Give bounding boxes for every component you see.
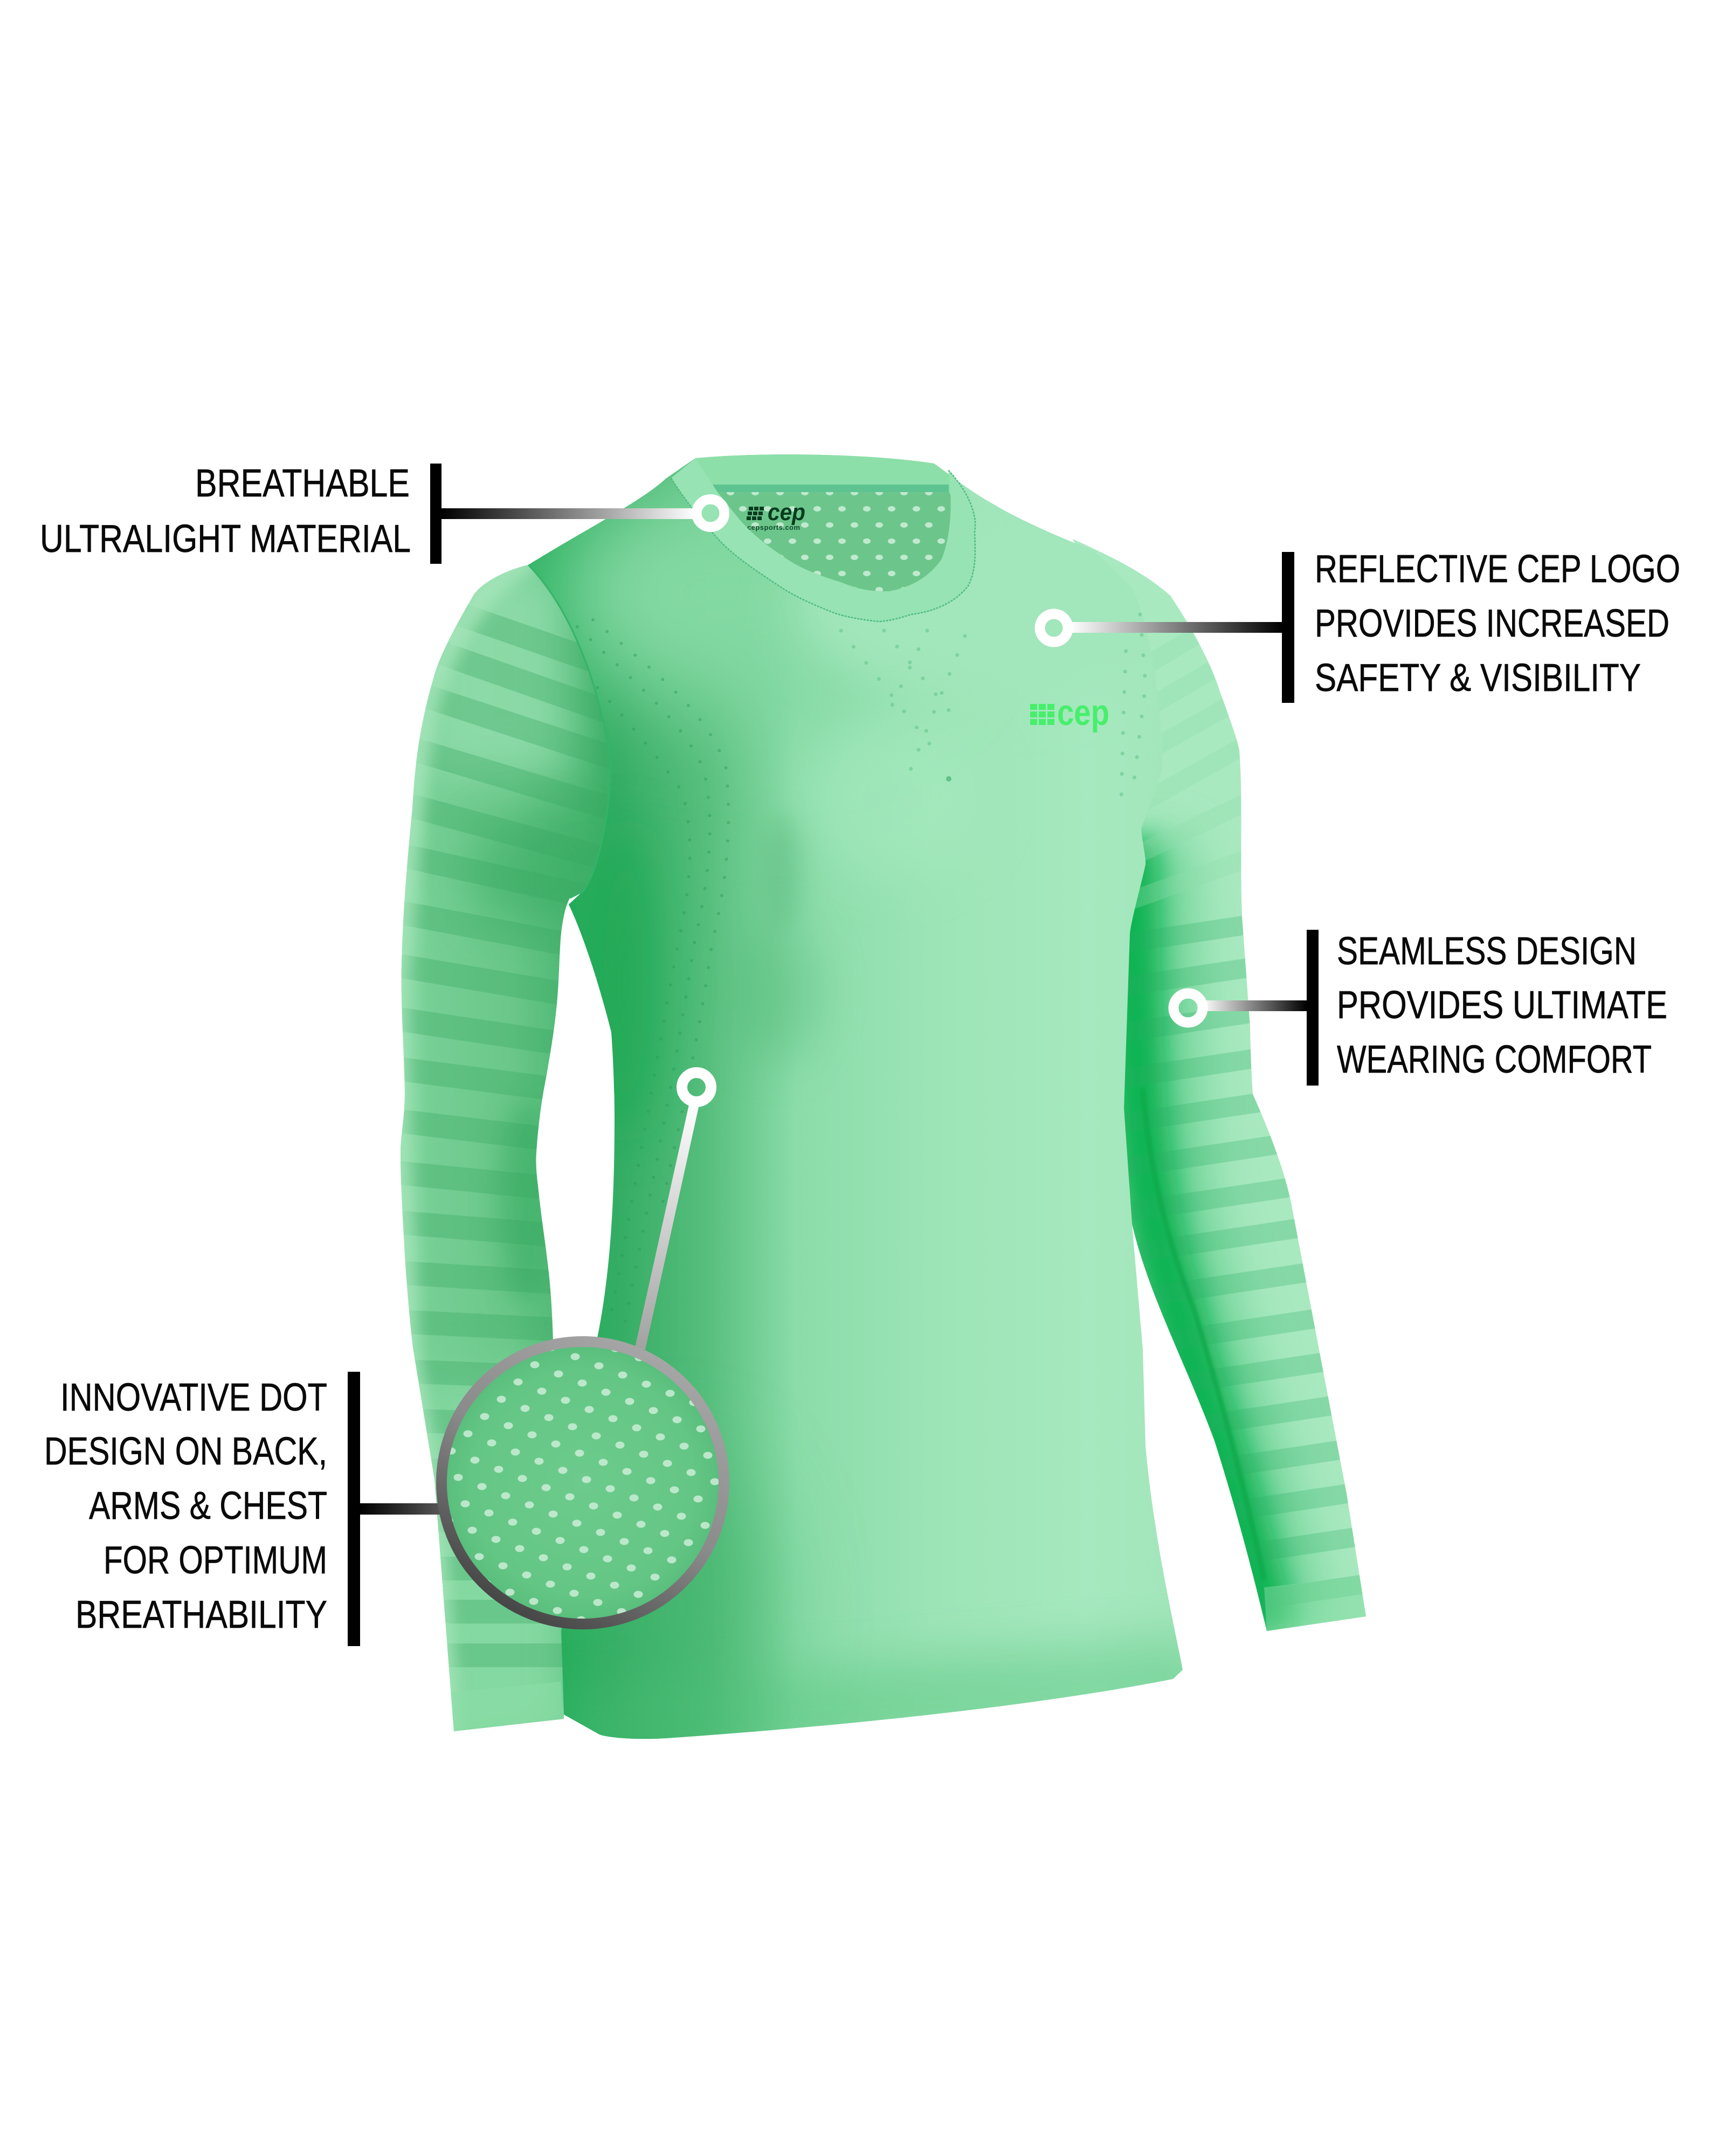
text: DESIGN ON BACK, (44, 1430, 327, 1473)
text: SAFETY & VISIBILITY (1315, 657, 1641, 700)
ring marker (682, 1073, 711, 1102)
bar (430, 464, 441, 564)
product photo: green long sleeve shirt (401, 454, 1366, 1739)
left cuff (451, 1682, 564, 1724)
text: WEARING COMFORT (1337, 1038, 1652, 1081)
text: ARMS & CHEST (89, 1484, 327, 1528)
leader line (441, 508, 695, 519)
crew neck collar (671, 458, 975, 621)
perforation dots (561, 620, 728, 1324)
text (40, 462, 411, 561)
leader line (1202, 1000, 1307, 1011)
shoulder and chest highlight (550, 474, 938, 711)
right sleeve (1073, 539, 1366, 1631)
outer edge light on left sleeve (394, 555, 534, 1736)
diagonal leader line (635, 1105, 699, 1350)
sleeve seam (528, 565, 611, 898)
bar (1282, 552, 1294, 703)
ring marker (1174, 993, 1203, 1022)
seam along inner arm (1143, 1089, 1264, 1579)
callout: seamless design (1174, 930, 1667, 1086)
leader line to lens (360, 1503, 442, 1515)
neck label logo: cep (768, 499, 805, 526)
ring marker (1040, 614, 1068, 642)
text: PROVIDES ULTIMATE (1337, 984, 1667, 1027)
bar (348, 1372, 360, 1646)
right cuff (1264, 1577, 1366, 1631)
text: SEAMLESS DESIGN (1337, 930, 1637, 973)
shirt body (518, 442, 1210, 1778)
text (1337, 930, 1667, 1081)
text (1315, 548, 1680, 700)
ring marker (696, 499, 724, 527)
neck label logo: cepsports.com (747, 523, 800, 531)
text: BREATHABLE (195, 462, 410, 505)
neck label logo (747, 499, 805, 531)
text: INNOVATIVE DOT (60, 1376, 327, 1419)
left sleeve (401, 565, 610, 1731)
callout: breathable ultralight material (40, 462, 724, 564)
text (44, 1376, 327, 1636)
leader line (1070, 622, 1282, 633)
text: FOR OPTIMUM (104, 1539, 327, 1582)
text: BREATHABILITY (75, 1593, 327, 1636)
callout: innovative dot design (44, 1073, 724, 1646)
callout: reflective CEP logo (1040, 548, 1680, 703)
back neck interior (695, 454, 960, 598)
text: ULTRALIGHT MATERIAL (40, 517, 411, 561)
chest CEP logo, reflective: cep (1057, 692, 1109, 733)
bar (1307, 930, 1319, 1086)
chest CEP logo, reflective (1030, 692, 1109, 733)
magnifier lens showing dot fabric (441, 1342, 724, 1624)
